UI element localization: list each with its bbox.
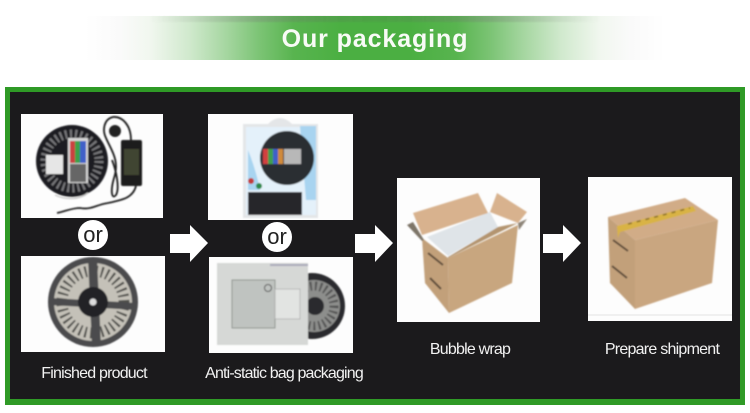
photo: LED strip reel: [21, 256, 165, 352]
label: bubble wrap: Bubble wrap: [430, 341, 511, 358]
photo: sealed box: [588, 177, 732, 321]
header band: [85, 16, 665, 60]
photo: open box with bubble wrap: [397, 178, 540, 322]
label: finished product: Finished product: [41, 365, 148, 382]
photo: anti-static bag and reel: [209, 257, 353, 353]
arrow 2: [355, 225, 393, 262]
label: anti-static bag packaging: Anti-static bag packaging: [205, 365, 363, 382]
main panel: [5, 87, 745, 405]
photo: blister pack: [208, 114, 353, 220]
arrow 3: [543, 225, 581, 262]
badge: or (middle): or: [267, 224, 287, 249]
arrow 1: [170, 225, 208, 262]
badge: or (middle): [262, 222, 292, 252]
title: Our packaging: [282, 25, 468, 53]
label: prepare shipment: Prepare shipment: [605, 341, 720, 358]
badge: or (left): [78, 220, 108, 250]
badge: or (left): or: [83, 222, 103, 247]
photo: LED strip kit with remote and power adapter: [21, 114, 163, 218]
